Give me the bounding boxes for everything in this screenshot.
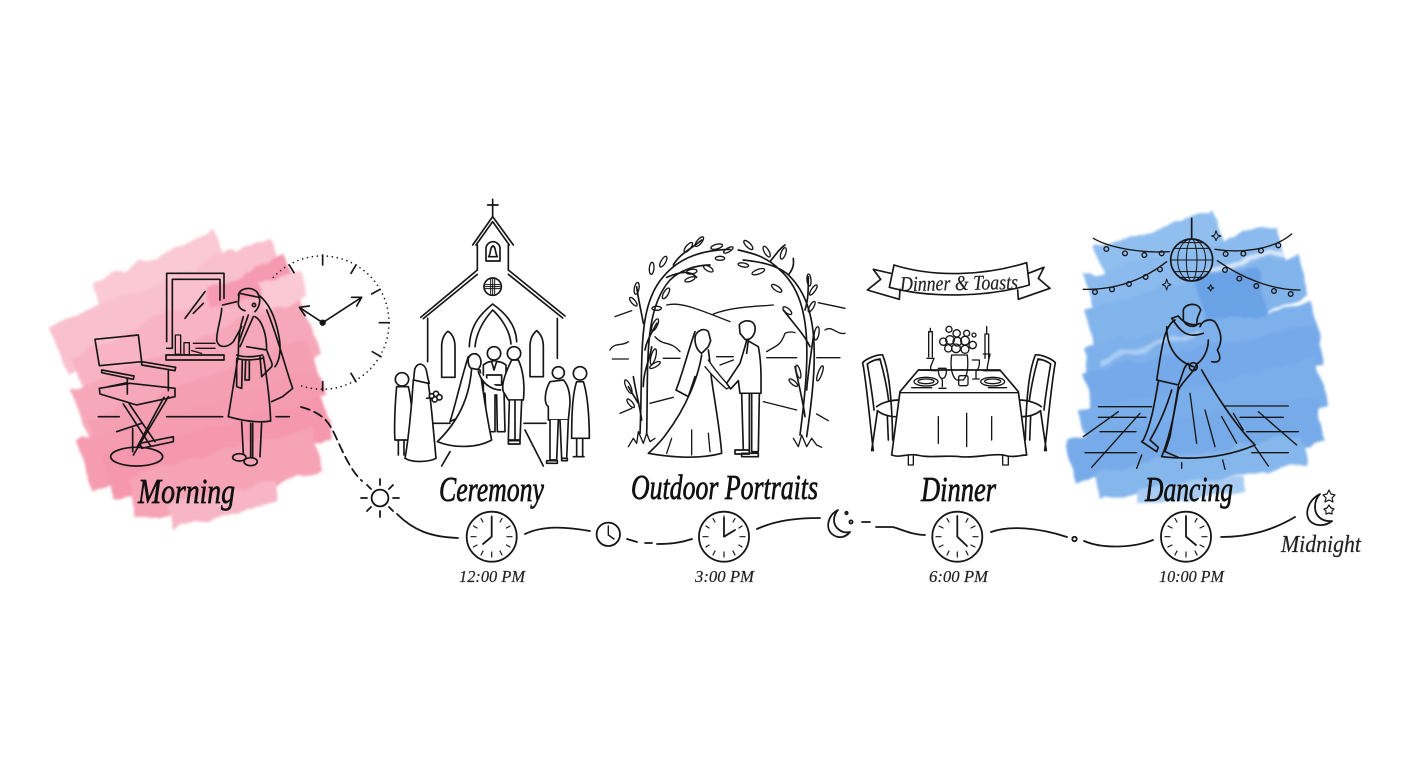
icon: sun bbox=[361, 479, 399, 517]
panel: outdoor portraits bbox=[610, 236, 845, 507]
panel: dancing bbox=[1070, 218, 1322, 509]
tree arch bbox=[623, 236, 825, 447]
watercolor wash: blue bbox=[1070, 226, 1322, 497]
dancing couple bbox=[1142, 304, 1255, 458]
disco ball bbox=[1162, 218, 1221, 291]
label: Outdoor Portraits: Outdoor Portraits bbox=[631, 468, 818, 507]
dance floor bbox=[1083, 406, 1298, 469]
watercolor wash: pink bbox=[58, 246, 328, 518]
time label: 3:00 PM bbox=[694, 567, 755, 586]
panel: ceremony bbox=[395, 199, 589, 509]
label: Dinner: Dinner bbox=[920, 470, 996, 509]
time label: 6:00 PM bbox=[929, 567, 989, 586]
landscape bbox=[610, 303, 845, 421]
clock: 10:00 PM bbox=[1159, 512, 1225, 586]
timeline path segments bbox=[397, 514, 1295, 547]
label: Dancing: Dancing bbox=[1144, 470, 1233, 509]
mirror and shelf bbox=[166, 273, 224, 360]
clock: 6:00 PM bbox=[929, 512, 989, 586]
officiant bbox=[483, 347, 506, 432]
illustration: couple under leafy arch bbox=[610, 236, 845, 457]
church bbox=[421, 199, 565, 466]
bride bbox=[648, 330, 730, 457]
makeup chair bbox=[95, 335, 289, 466]
label: Morning: Morning bbox=[137, 472, 235, 511]
illustration: banner and dinner table bbox=[863, 263, 1055, 465]
icon: dotted morning clock bbox=[273, 255, 389, 391]
panel: morning bbox=[58, 246, 328, 518]
banner text: Dinner & Toasts: Dinner & Toasts bbox=[899, 270, 1018, 296]
small waypoint dot bbox=[1072, 537, 1077, 541]
string lights bbox=[1083, 234, 1300, 296]
label: Midnight: Midnight bbox=[1280, 532, 1362, 558]
label: Ceremony: Ceremony bbox=[439, 470, 544, 509]
icon: small clock bbox=[597, 523, 620, 546]
banner bbox=[867, 263, 1050, 299]
illustration: church and wedding party bbox=[395, 199, 589, 466]
bride and veil bbox=[437, 354, 501, 446]
guests bbox=[545, 367, 589, 463]
clock: 3:00 PM bbox=[694, 512, 755, 586]
icon: crescent moon and stars bbox=[828, 510, 853, 537]
bride in robe bbox=[217, 288, 293, 466]
groom bbox=[727, 321, 761, 457]
clock: 12:00 PM bbox=[459, 512, 526, 586]
bridesmaids bbox=[395, 364, 442, 461]
table setting bbox=[912, 326, 1007, 388]
groom bbox=[503, 347, 524, 444]
dashed path from morning to sun bbox=[301, 407, 362, 481]
table and chairs bbox=[863, 355, 1055, 465]
icon: midnight moon with stars bbox=[1307, 490, 1335, 525]
illustration: couple, disco ball, string lights bbox=[1083, 218, 1300, 469]
time label: 12:00 PM bbox=[459, 567, 526, 586]
time label: 10:00 PM bbox=[1159, 567, 1225, 586]
illustration: chair, mirror and bride bbox=[95, 273, 293, 466]
panel: dinner bbox=[863, 263, 1055, 509]
